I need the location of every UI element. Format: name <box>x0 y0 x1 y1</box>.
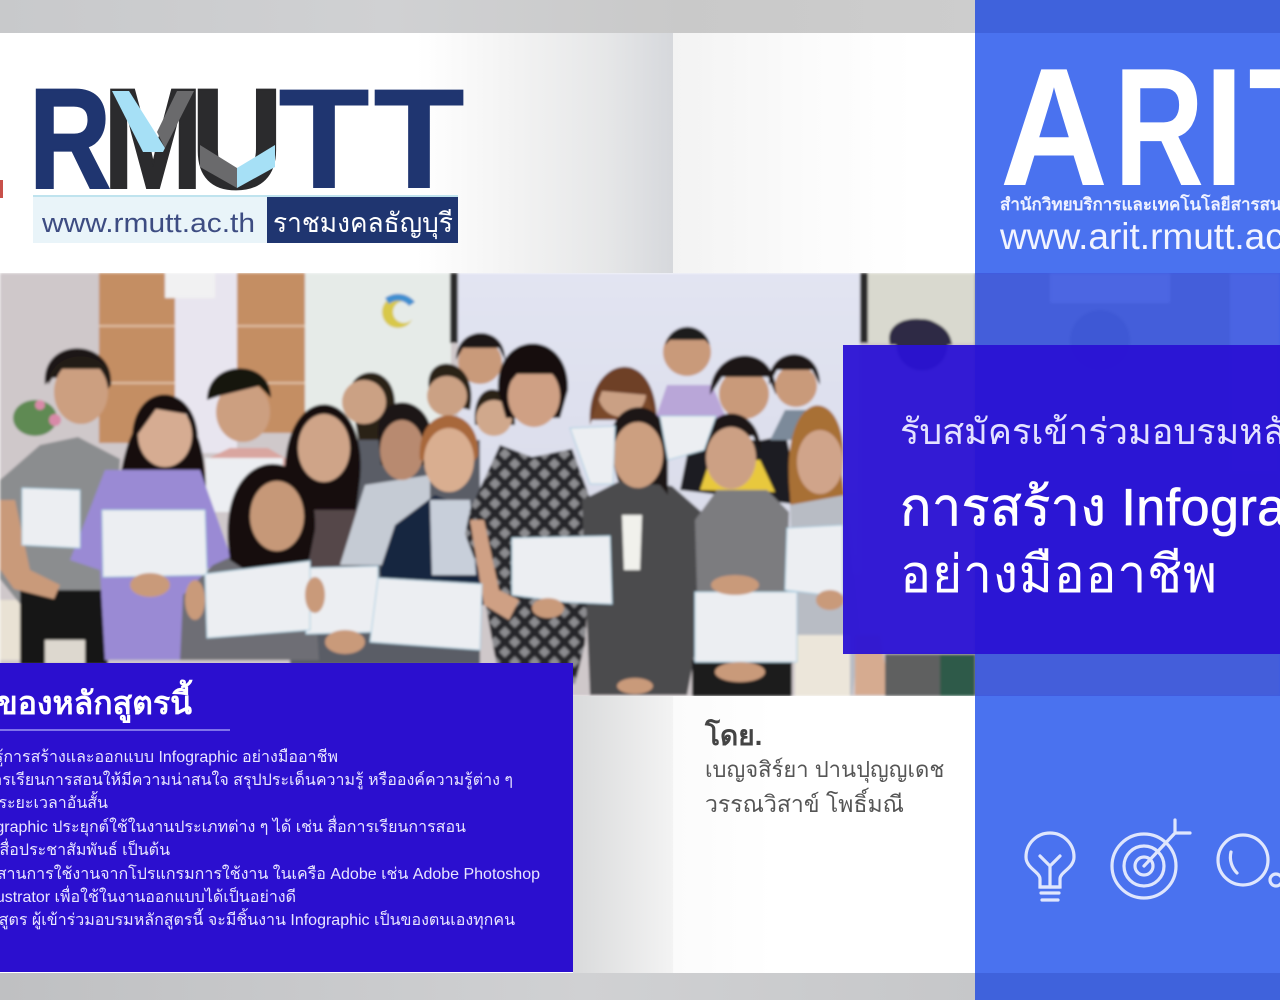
drink on table <box>45 640 85 664</box>
logo wordmark: R <box>29 60 111 219</box>
seal fragment <box>0 180 3 198</box>
woman in navy jacket <box>380 495 493 605</box>
woman in striped top <box>340 475 430 565</box>
logo url strip <box>33 196 267 243</box>
top grey strip <box>0 0 975 33</box>
group photo <box>0 273 1280 696</box>
woman with auburn hair <box>789 405 846 520</box>
trainer credit <box>704 719 944 817</box>
heading underline <box>0 729 230 731</box>
logo url: www.rmutt.ac.th <box>41 208 255 238</box>
hands <box>130 573 844 694</box>
icon: light bulb <box>1026 833 1074 900</box>
certificates <box>22 416 843 662</box>
logo wordmark: T <box>278 60 370 219</box>
right blue column <box>975 0 1280 1000</box>
ARIT wordmark <box>1000 33 1280 193</box>
back certificate <box>205 458 283 512</box>
man in grey shirt <box>0 437 120 609</box>
boy with glasses <box>205 448 288 475</box>
blue column top band <box>975 0 1280 33</box>
woman in grey polo <box>695 490 789 592</box>
woman in grey jacket <box>582 480 706 695</box>
logo wordmark <box>29 60 465 219</box>
trainer name 2: วรรณวิสาข์ โพธิ์มณี <box>705 791 904 817</box>
background people <box>655 385 727 420</box>
logo wordmark: M <box>103 60 203 219</box>
blue column bottom band <box>975 973 1280 1000</box>
icon: magnifying glass <box>1218 835 1280 886</box>
credit heading: โดย. <box>705 720 762 751</box>
people under right tint <box>885 273 1280 696</box>
ARIT block <box>1000 33 1280 257</box>
logo: RMUTT <box>0 60 465 243</box>
bottom grey strip <box>0 973 975 1000</box>
logo thai name: ราชมงคลธัญบุรี <box>273 208 453 240</box>
icons row <box>1024 818 1280 902</box>
header panel: right white band <box>673 33 975 273</box>
main woman in patterned dress <box>465 445 594 684</box>
blue tint over photo edge <box>975 273 1280 696</box>
icon: target with arrow <box>1112 820 1190 898</box>
woman with glasses <box>285 404 361 520</box>
course title line 2: อย่างมืออาชีพ <box>900 546 1218 604</box>
woman in purple <box>118 404 210 525</box>
photo of training group <box>0 273 1280 696</box>
course title panel <box>843 345 1280 654</box>
header panel: left white band <box>0 33 673 273</box>
panel: course benefits <box>0 663 573 972</box>
logo wordmark: T <box>373 60 465 219</box>
front woman with lanyard <box>180 540 319 660</box>
trainer name 1: เบญจสิร์ยา ปานปุญญเดช <box>705 757 944 782</box>
logo thai name box <box>267 197 458 243</box>
lower band: white and grey <box>573 696 975 973</box>
logo wordmark: U <box>191 60 283 219</box>
